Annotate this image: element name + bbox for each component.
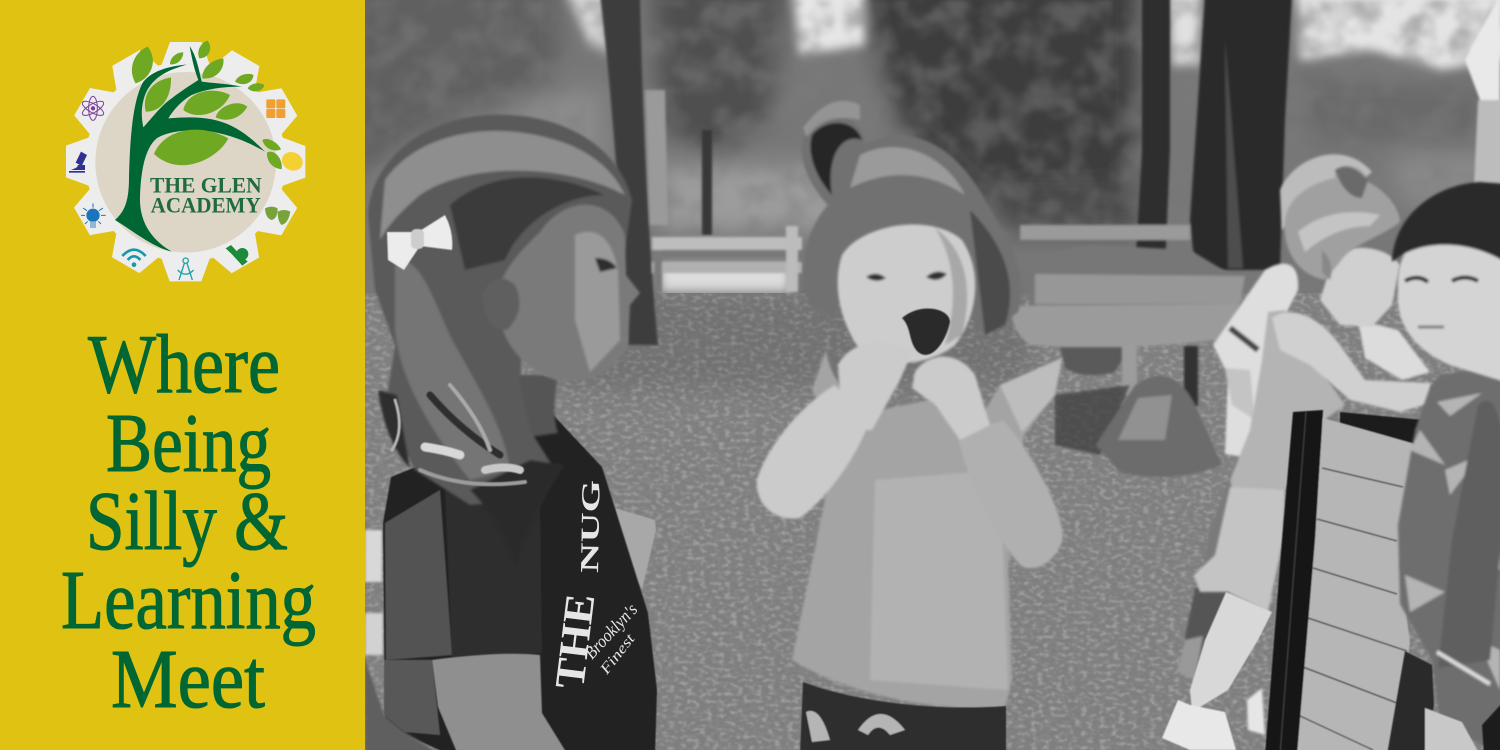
arms and hands	[757, 342, 1063, 568]
photo: children playing outdoors	[340, 0, 1500, 750]
icon: drafting compass	[178, 258, 194, 280]
ponytail strands	[392, 385, 525, 484]
planter dish with plants and bags	[1010, 245, 1245, 477]
shirt lettering: Brooklyn's	[580, 599, 641, 663]
dark t-shirt	[383, 403, 657, 750]
face	[838, 225, 975, 363]
patterned pants	[800, 682, 1006, 750]
arm	[432, 654, 568, 750]
sweater	[1398, 365, 1500, 750]
metal bucket	[615, 508, 656, 590]
dress and skirt	[1194, 310, 1345, 612]
slogan text: Learning	[61, 554, 316, 647]
slogan text: Being	[106, 397, 271, 490]
hair and top knot	[802, 101, 1021, 338]
academy name: THE GLEN	[150, 172, 262, 197]
beige disc	[95, 72, 276, 253]
dark trousers and hand	[1387, 651, 1500, 750]
head	[1392, 182, 1500, 382]
icon: atom	[80, 96, 106, 120]
neck	[519, 374, 558, 438]
icon: calculator	[266, 99, 285, 118]
curly hair	[1285, 166, 1400, 280]
left girl	[365, 115, 657, 750]
slogan text: Silly &	[86, 475, 288, 568]
slogan text	[61, 318, 316, 726]
icon: drama masks	[265, 207, 290, 225]
icon: microscope	[69, 152, 87, 173]
shirt lettering: Finest	[597, 631, 639, 678]
leaves	[132, 41, 282, 169]
icon: light bulb	[81, 203, 106, 228]
icon: wrench and gear	[226, 245, 248, 266]
shirt lettering: NUG	[575, 480, 606, 573]
middle girl smelling a leaf	[757, 101, 1063, 750]
icon: wifi	[122, 250, 146, 266]
gear teeth	[66, 42, 305, 281]
toddler with topknot at the box	[1162, 166, 1434, 750]
child in camouflage sweater	[1387, 182, 1500, 750]
yellow side panel	[0, 0, 365, 750]
photo background: trees, sky and fence	[340, 0, 1500, 750]
sleeveless top	[792, 350, 1062, 708]
academy name: ACADEMY	[151, 192, 261, 217]
hair bow	[387, 215, 452, 270]
legs and shoe	[1162, 592, 1272, 750]
face	[502, 204, 640, 381]
shirt lettering: THE	[547, 591, 605, 691]
academy name	[150, 172, 262, 217]
grass	[365, 293, 1500, 750]
slogan text: Where	[88, 318, 280, 411]
hair	[368, 114, 632, 506]
slogan text: Meet	[111, 633, 265, 726]
shirt lettering	[556, 481, 637, 687]
logo: The Glen Academy gear and tree	[66, 41, 306, 281]
tree trunks and fence	[600, 0, 1500, 345]
tree trunk and branches	[115, 46, 265, 252]
wooden box with black post	[1265, 410, 1424, 750]
back child in white shirt	[1177, 154, 1430, 735]
icon: artist palette	[279, 149, 306, 174]
leaf	[902, 308, 950, 355]
arm and face	[1272, 248, 1434, 412]
